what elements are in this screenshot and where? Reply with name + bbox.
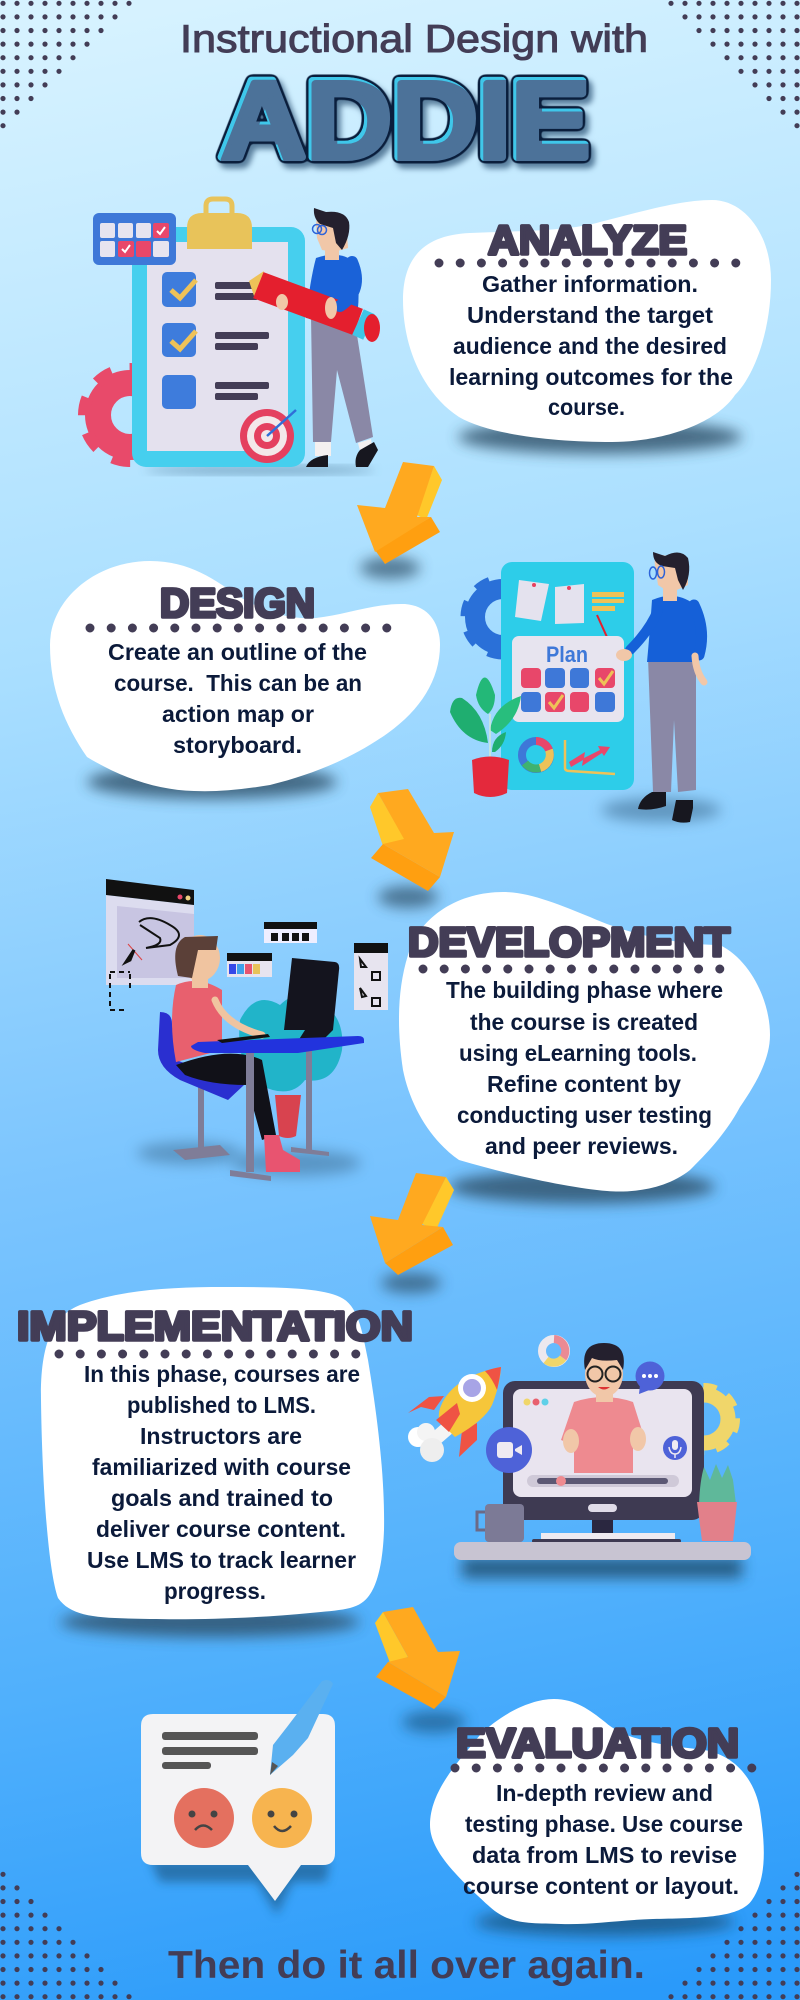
text: analyze description	[449, 271, 733, 420]
panel: design	[50, 561, 440, 799]
icon: red gear	[84, 369, 176, 461]
plant behind desk	[239, 995, 342, 1138]
text: development description: the course is created	[470, 1009, 698, 1035]
text: implementation description: familiarized with course	[92, 1454, 351, 1480]
icon: microphone	[663, 1436, 687, 1460]
person pointing	[616, 552, 704, 823]
panel: analyze	[403, 200, 771, 454]
illustration: design plan board and person	[450, 552, 721, 823]
plan board	[501, 562, 634, 790]
text: design description: course. This can be an	[114, 670, 362, 696]
developer	[172, 935, 300, 1172]
heading: development: DEVELOPMENT	[408, 919, 730, 965]
icon: video camera	[486, 1427, 532, 1473]
text: evaluation description: data from LMS to revise	[472, 1842, 737, 1868]
icon: yellow gear	[672, 1387, 736, 1451]
person with pencil	[249, 208, 380, 467]
icon: calendar	[93, 213, 176, 265]
arrow: implementation to evaluation	[375, 1607, 466, 1733]
text: development description: conducting user testing	[457, 1102, 712, 1128]
text: development description: The building phase where	[446, 977, 723, 1003]
checklist rows	[162, 272, 269, 409]
text: development description: Refine content by	[487, 1071, 681, 1097]
text: implementation description: deliver course content.	[96, 1516, 346, 1542]
desk	[191, 1034, 364, 1181]
text: design description: Create an outline of the	[108, 639, 367, 665]
window with bezier curve	[106, 879, 194, 1010]
arrow: development to implementation	[370, 1173, 454, 1293]
icon: sad face	[174, 1788, 234, 1848]
icon: happy face	[252, 1788, 312, 1848]
arrow: design to development	[370, 789, 454, 908]
panel: development	[399, 892, 770, 1204]
text: evaluation description: course content or layout.	[463, 1873, 739, 1899]
monitor	[284, 958, 339, 1041]
text: implementation description: Use LMS to track learner	[87, 1547, 356, 1573]
text: development description: using eLearning tools.	[459, 1040, 697, 1066]
text: implementation description: goals and trained to	[111, 1485, 333, 1511]
chair	[158, 1012, 244, 1160]
potted plant on desk	[697, 1464, 737, 1541]
title: Instructional Design with: Instructional Design with	[180, 18, 648, 61]
icon: target	[240, 409, 296, 463]
text: development description: and peer reviews.	[485, 1133, 678, 1159]
text: design description	[108, 639, 367, 758]
heading: design: DESIGN	[160, 580, 315, 626]
text: design description: action map or	[162, 701, 314, 727]
illustration: online instructor on monitor	[408, 1339, 751, 1578]
text: development description	[446, 977, 723, 1159]
text: evaluation description	[463, 1780, 743, 1899]
heading: implementation: IMPLEMENTATION	[17, 1303, 413, 1349]
instructor	[561, 1343, 646, 1473]
text: analyze description: Gather information.	[482, 271, 698, 297]
clipboard board	[132, 199, 305, 467]
text: analyze description: course.	[548, 394, 625, 420]
icon: blue gear	[465, 579, 541, 655]
text: evaluation description: testing phase. Use course	[465, 1811, 743, 1837]
arrow: analyze to design	[357, 462, 442, 579]
text: implementation description: published to LMS.	[127, 1392, 316, 1418]
panel: evaluation	[430, 1699, 764, 1936]
progress bar	[527, 1475, 679, 1487]
panel: implementation	[17, 1287, 413, 1637]
card	[141, 1714, 335, 1901]
illustration: analyze clipboard and person	[84, 199, 380, 474]
text: analyze description: audience and the desired	[453, 333, 727, 359]
mug	[477, 1504, 524, 1542]
icon: potted plant	[450, 678, 521, 797]
illustration: developer at desk	[106, 879, 388, 1181]
text: design description: storyboard.	[173, 732, 302, 758]
monitor with video call	[503, 1381, 704, 1534]
icon: pen	[270, 1680, 333, 1775]
keyboard and shelf	[454, 1533, 751, 1560]
text: implementation description: In this phase, courses are	[84, 1361, 360, 1387]
text: analyze description: Understand the target	[467, 302, 713, 328]
heading: analyze: ANALYZE	[488, 217, 687, 263]
icon: chat bubble	[636, 1362, 664, 1394]
label: Plan: Plan	[546, 642, 588, 667]
text: implementation description	[84, 1361, 360, 1604]
title: ADDIE: ADDIE	[219, 58, 589, 181]
heading: evaluation: EVALUATION	[456, 1720, 739, 1766]
tool panels	[227, 922, 388, 1010]
closing line: Then do it all over again.	[168, 1944, 645, 1987]
illustration: feedback card with faces	[141, 1680, 335, 1915]
icon: rocket	[408, 1367, 501, 1462]
icon: donut chart	[542, 1339, 566, 1363]
text: implementation description: progress.	[164, 1578, 266, 1604]
text: implementation description: Instructors are	[140, 1423, 302, 1449]
text: analyze description: learning outcomes for the	[449, 364, 733, 390]
text: evaluation description: In-depth review and	[496, 1780, 713, 1806]
